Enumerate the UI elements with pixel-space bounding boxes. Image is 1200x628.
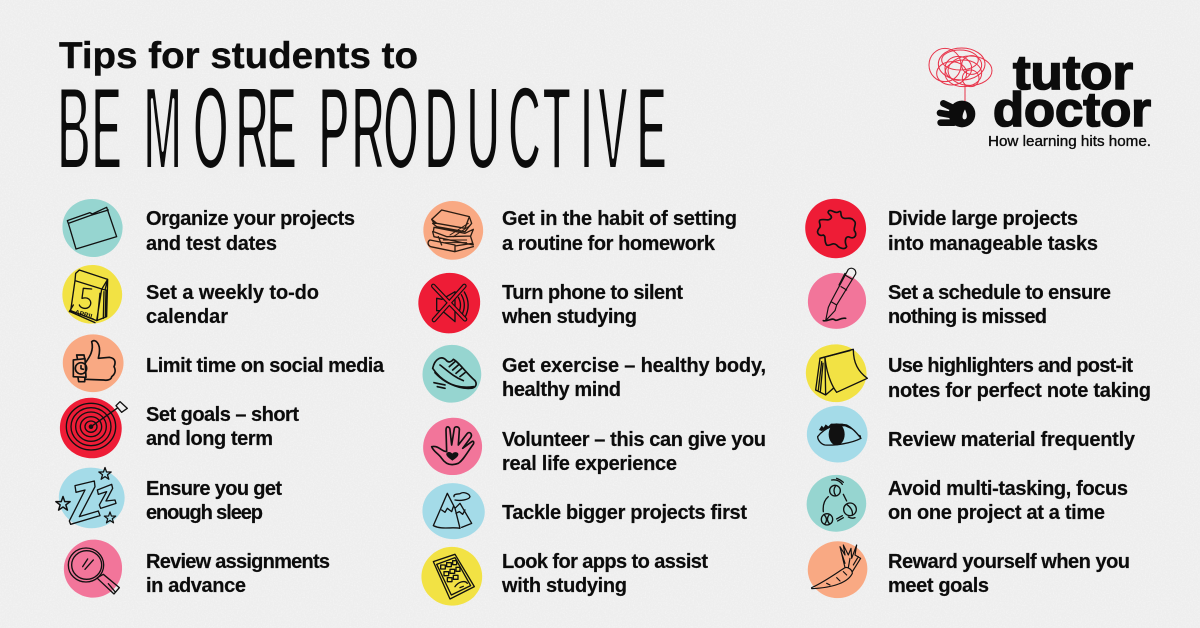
tagline: How learning hits home. bbox=[988, 134, 1151, 150]
tip: reward: meet goals bbox=[888, 575, 989, 597]
tip: exercise: Get exercise – healthy body, bbox=[502, 355, 766, 377]
icon: muted speaker bbox=[410, 264, 489, 342]
tip: apps: with studying bbox=[501, 575, 627, 597]
tip: multi-tasking: Avoid multi-tasking, focus bbox=[888, 478, 1128, 500]
icon: black hand bbox=[940, 101, 975, 127]
icon: folder bbox=[62, 199, 123, 257]
logo: tutor doctor bbox=[929, 47, 1151, 150]
tip: organize: Organize your projects bbox=[146, 208, 355, 230]
tip: divide projects: into manageable tasks bbox=[888, 233, 1098, 255]
tip: social media: Limit time on social media bbox=[146, 355, 385, 377]
tip: calendar bbox=[51, 255, 319, 334]
tip: highlighters bbox=[795, 333, 1151, 413]
heading: be more productive: BE MORE PRODUCTIVE bbox=[57, 59, 667, 196]
icon: mountains bbox=[417, 479, 489, 544]
tip: exercise bbox=[411, 333, 766, 415]
tip: organize: and test dates bbox=[146, 233, 277, 255]
wordmark: tutor: tutor bbox=[1013, 47, 1133, 100]
icon: carrot bbox=[797, 531, 878, 609]
icon: running shoe bbox=[411, 333, 493, 415]
icon: juggling balls bbox=[796, 464, 877, 542]
tip: goals: and long term bbox=[146, 428, 273, 450]
tip: highlighters: Use highlighters and post-it bbox=[888, 355, 1133, 377]
tip: bigger projects: Tackle bigger projects first bbox=[502, 502, 747, 524]
tip: highlighters: notes for perfect note taking bbox=[888, 380, 1151, 402]
icon: eye bbox=[794, 394, 881, 474]
tip: schedule bbox=[803, 268, 1111, 333]
tip: assignments: in advance bbox=[146, 575, 246, 597]
tip: social media bbox=[51, 322, 385, 404]
icon: puzzle piece bbox=[796, 191, 875, 266]
tip: volunteer bbox=[418, 413, 766, 480]
tip: reward: Reward yourself when you bbox=[888, 551, 1130, 573]
tip: routine: a routine for homework bbox=[502, 233, 716, 255]
wordmark: doctor: doctor bbox=[993, 84, 1151, 137]
tip: divide projects bbox=[796, 191, 1098, 266]
tip: volunteer: real life experience bbox=[502, 453, 677, 475]
title bbox=[57, 35, 667, 196]
tip: phone silent: when studying bbox=[501, 306, 637, 328]
column 1 bbox=[46, 199, 385, 602]
tip: goals: Set goals – short bbox=[146, 404, 299, 426]
tip: multi-tasking bbox=[796, 464, 1128, 542]
tip: schedule: Set a schedule to ensure bbox=[888, 282, 1111, 304]
icon: calendar: APRIL bbox=[74, 309, 95, 321]
tip: review material bbox=[794, 394, 1136, 474]
icon: magnifying glass bbox=[59, 535, 127, 602]
tip: apps bbox=[410, 535, 708, 618]
tip: assignments: Review assignments bbox=[146, 551, 330, 573]
tip: goals bbox=[51, 389, 299, 467]
tip: sleep: Ensure you get bbox=[146, 478, 282, 500]
tip: divide projects: Divide large projects bbox=[888, 208, 1078, 230]
tip: routine bbox=[411, 190, 737, 271]
icon: book stack bbox=[411, 190, 495, 271]
tip: organize bbox=[62, 199, 355, 257]
tip: phone silent bbox=[410, 264, 683, 342]
icon: sleeping z and stars bbox=[46, 457, 137, 539]
icon: hand with heart bbox=[418, 413, 487, 480]
column 3 bbox=[794, 191, 1151, 609]
tip: routine: Get in the habit of setting bbox=[502, 208, 737, 230]
icon: smartphone bbox=[410, 535, 494, 618]
tip: bigger projects bbox=[417, 479, 747, 544]
heading: tips for students to: Tips for students to bbox=[59, 35, 418, 76]
icon: calendar bbox=[51, 255, 133, 334]
tip: schedule: nothing is missed bbox=[888, 306, 1047, 328]
tip: review material: Review material frequently bbox=[888, 429, 1136, 451]
tip: sleep bbox=[46, 457, 282, 539]
tip: calendar: calendar bbox=[146, 306, 228, 328]
icon: red scribble brain bbox=[929, 48, 992, 103]
icon: target bbox=[51, 389, 131, 467]
column 2 bbox=[410, 190, 766, 618]
tip: exercise: healthy mind bbox=[502, 379, 621, 401]
icon: fountain pen bbox=[803, 268, 871, 333]
icon: thumbs up bbox=[51, 322, 135, 404]
tip: reward bbox=[797, 531, 1130, 609]
tip: sleep: enough sleep bbox=[146, 502, 263, 524]
tip: volunteer: Volunteer – this can give you bbox=[502, 429, 766, 451]
tip: assignments bbox=[59, 535, 330, 602]
tip: multi-tasking: on one project at a time bbox=[888, 502, 1105, 524]
icon: sticky notes bbox=[795, 333, 877, 413]
tip: phone silent: Turn phone to silent bbox=[502, 282, 683, 304]
tip: calendar: Set a weekly to-do bbox=[146, 282, 319, 304]
tip: apps: Look for apps to assist bbox=[502, 551, 708, 573]
